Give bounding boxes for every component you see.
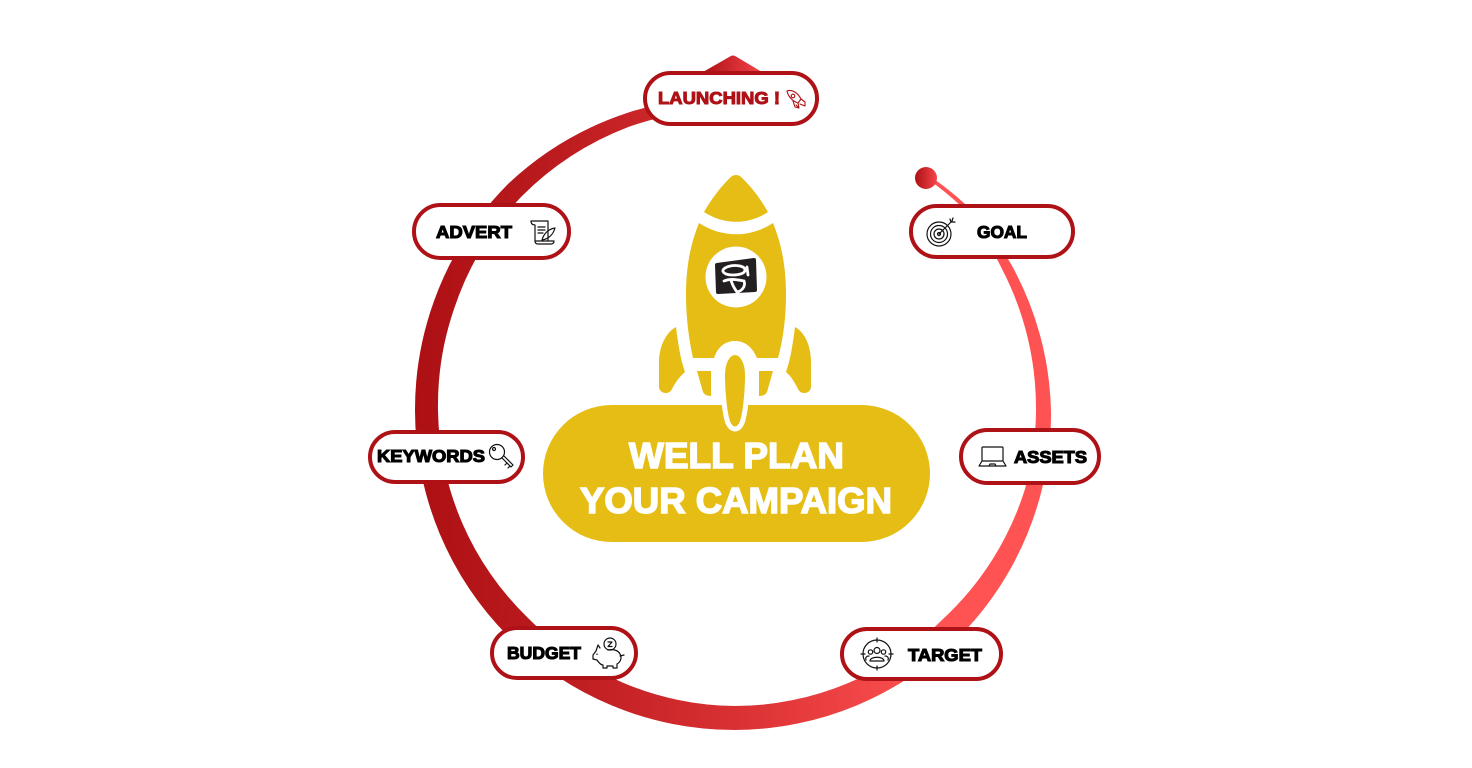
title text [580,435,892,521]
rocket lower body left [697,371,711,396]
icon: small rocket [787,90,805,108]
step: budget: BUDGET [507,643,581,663]
ring start dot [915,167,937,189]
rocket fin left [659,327,685,393]
step: keywords: KEYWORDS [377,446,485,466]
step: keywords [370,432,523,482]
step: goal: GOAL [977,222,1027,242]
rocket fin right [786,327,811,393]
rocket [659,175,811,396]
main title pill [543,352,930,542]
logo [717,260,755,292]
porthole [706,246,766,308]
title text: YOUR CAMPAIGN [580,480,892,521]
step: budget [492,628,636,678]
rocket lower body right [759,371,773,396]
step: assets: ASSETS [1014,447,1087,467]
step: launching [645,73,817,124]
icon: scroll and quill [531,221,555,244]
icon: laptop [979,447,1006,466]
step: launching: LAUNCHING ! [658,88,780,108]
step: target: TARGET [908,645,982,665]
icon: audience target [861,638,893,670]
step: advert: ADVERT [436,222,512,242]
rocket body [686,223,786,358]
icon: piggy bank [593,638,624,668]
rocket nose [704,175,768,222]
step: goal [911,206,1073,257]
icon: key [490,444,513,468]
step: target [842,629,1001,679]
progress ring [415,56,1051,730]
step: advert [414,205,569,258]
step: assets [961,430,1099,483]
title text: WELL PLAN [629,435,844,476]
icon: dartboard [927,218,955,246]
ring arrow head [703,56,762,72]
rocket flame [722,352,748,429]
